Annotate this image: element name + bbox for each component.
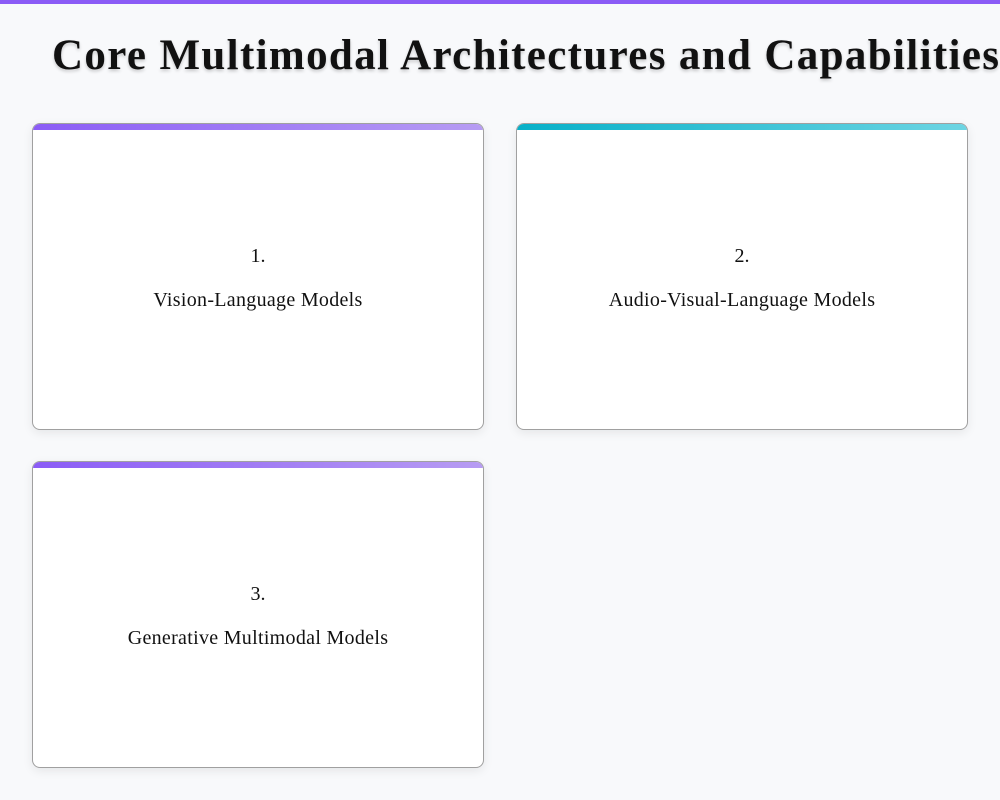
card title 2: Audio-Visual-Language Models bbox=[609, 289, 875, 311]
number 2: 2. bbox=[734, 245, 750, 267]
number 1: 1. bbox=[250, 245, 266, 267]
title: Core Multimodal Architectures and Capabilities bbox=[52, 32, 1000, 79]
panel: audio-visual-language models bbox=[516, 123, 968, 430]
number 3: 3. bbox=[250, 583, 266, 605]
panel: vision-language models bbox=[32, 123, 484, 430]
card title 3: Generative Multimodal Models bbox=[128, 627, 388, 649]
panel: generative multimodal models bbox=[32, 461, 484, 768]
card title 1: Vision-Language Models bbox=[153, 289, 363, 311]
